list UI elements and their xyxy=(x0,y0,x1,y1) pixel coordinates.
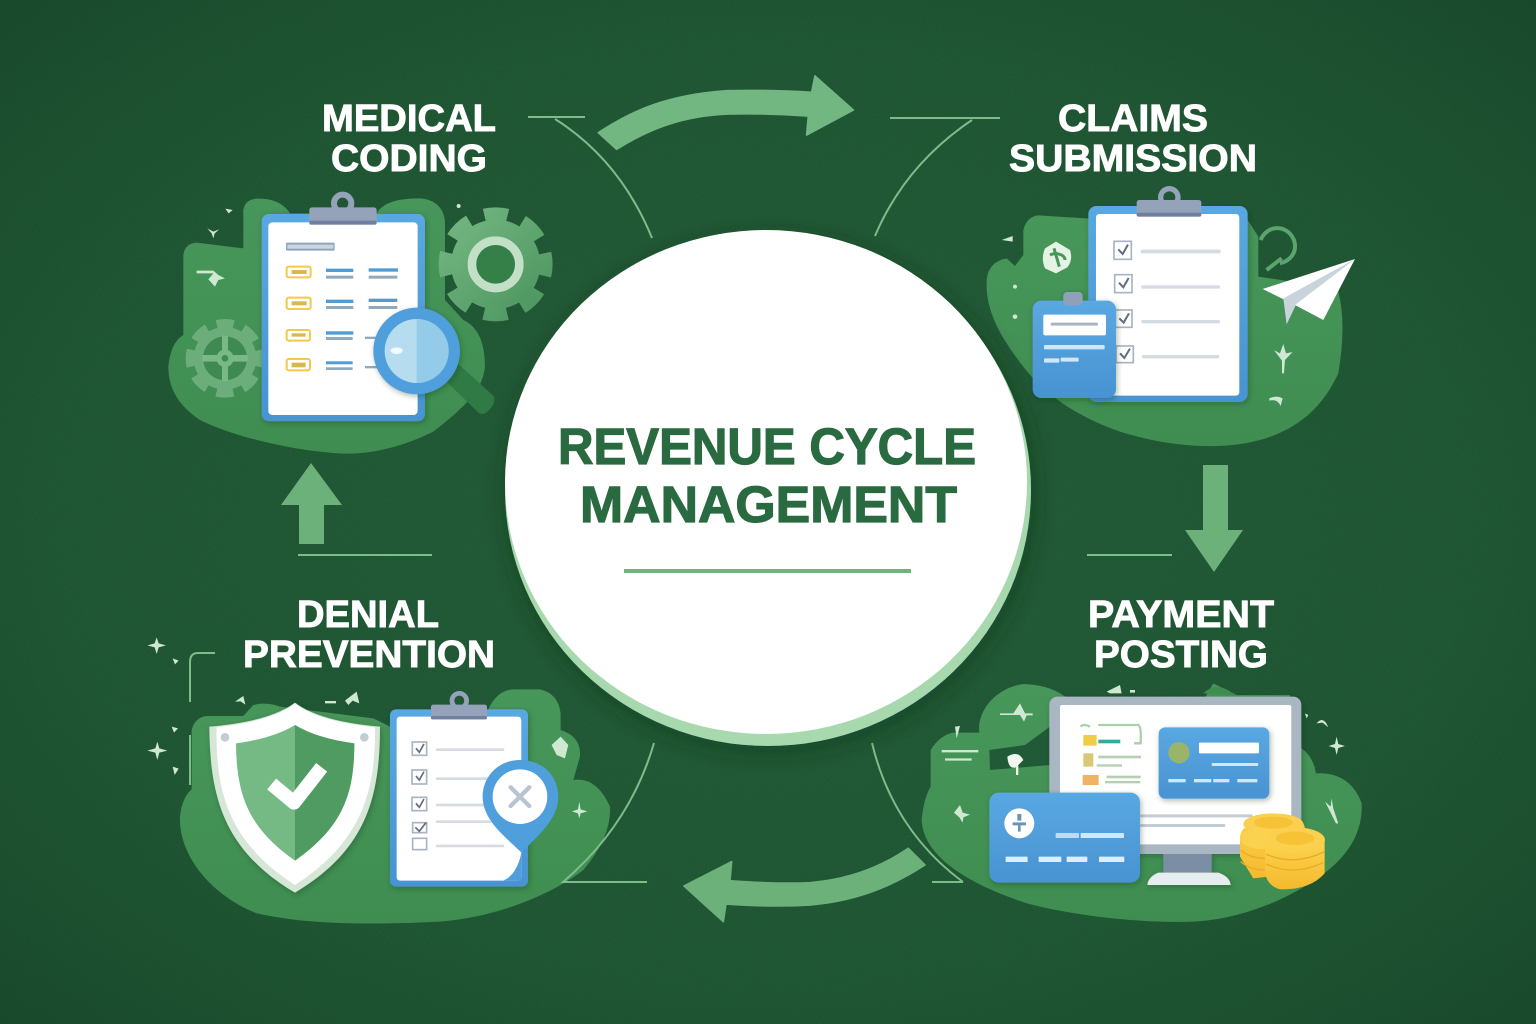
arrow: denial to coding xyxy=(281,463,342,544)
clip xyxy=(431,693,487,719)
arrow: coding to submission xyxy=(598,76,853,149)
coins xyxy=(1240,813,1325,889)
circle rim xyxy=(505,234,1031,746)
illustration: payment posting xyxy=(922,683,1362,922)
gear right xyxy=(446,214,546,314)
small card xyxy=(1159,727,1269,799)
monitor xyxy=(1049,697,1301,885)
title underline xyxy=(624,569,911,573)
sparkles xyxy=(942,685,1345,823)
sparkles xyxy=(197,204,461,287)
central circle xyxy=(505,230,1031,746)
thin connector lines xyxy=(190,117,1172,882)
heading: medical coding: MEDICAL xyxy=(322,98,496,140)
code list xyxy=(286,243,398,370)
heading: payment posting xyxy=(1088,594,1274,676)
sparkles xyxy=(147,637,587,818)
heading: claims submission xyxy=(1009,98,1257,180)
illustration: medical coding xyxy=(168,195,546,454)
shield xyxy=(209,703,380,893)
checklist xyxy=(1114,241,1221,363)
blob backdrop xyxy=(168,198,485,454)
rejection pin xyxy=(483,760,558,853)
dark gap xyxy=(989,727,1050,770)
clip xyxy=(1137,189,1201,217)
sparkles xyxy=(1002,236,1293,406)
heading: payment posting: PAYMENT xyxy=(1088,594,1274,636)
heading: denial prevention xyxy=(243,594,495,676)
paper plane xyxy=(1263,259,1355,324)
title: REVENUE CYCLE xyxy=(558,418,976,475)
heading: payment posting: POSTING xyxy=(1094,634,1268,676)
arrow: posting to denial xyxy=(684,848,925,922)
blob backdrop xyxy=(180,689,610,924)
heading: denial prevention: DENIAL xyxy=(297,594,439,636)
heading: medical coding xyxy=(322,98,496,180)
heading: denial prevention: PREVENTION xyxy=(243,634,495,676)
posting list xyxy=(1081,725,1141,785)
large card xyxy=(989,793,1140,883)
title xyxy=(558,418,976,533)
clipboard xyxy=(262,214,425,421)
illustration: claims submission xyxy=(987,189,1355,446)
checklist xyxy=(412,742,504,850)
heading: claims submission: SUBMISSION xyxy=(1009,138,1257,180)
refresh ring xyxy=(1261,228,1295,270)
gear left xyxy=(191,324,259,392)
blob backdrop xyxy=(987,215,1342,446)
magnifier xyxy=(373,308,494,414)
clipboard xyxy=(1088,206,1248,402)
white disc xyxy=(505,230,1027,734)
heading: medical coding: CODING xyxy=(331,138,487,180)
arrow: submission to posting xyxy=(1185,465,1243,572)
heading: claims submission: CLAIMS xyxy=(1058,98,1208,140)
report lines xyxy=(1140,814,1253,827)
dollar badge xyxy=(1043,242,1071,273)
illustration: denial prevention xyxy=(147,637,610,924)
clip xyxy=(309,195,377,225)
title: MANAGEMENT xyxy=(580,476,957,533)
clipboard xyxy=(390,709,528,887)
blob backdrop xyxy=(922,683,1362,922)
small blue clipboard xyxy=(1033,292,1116,398)
